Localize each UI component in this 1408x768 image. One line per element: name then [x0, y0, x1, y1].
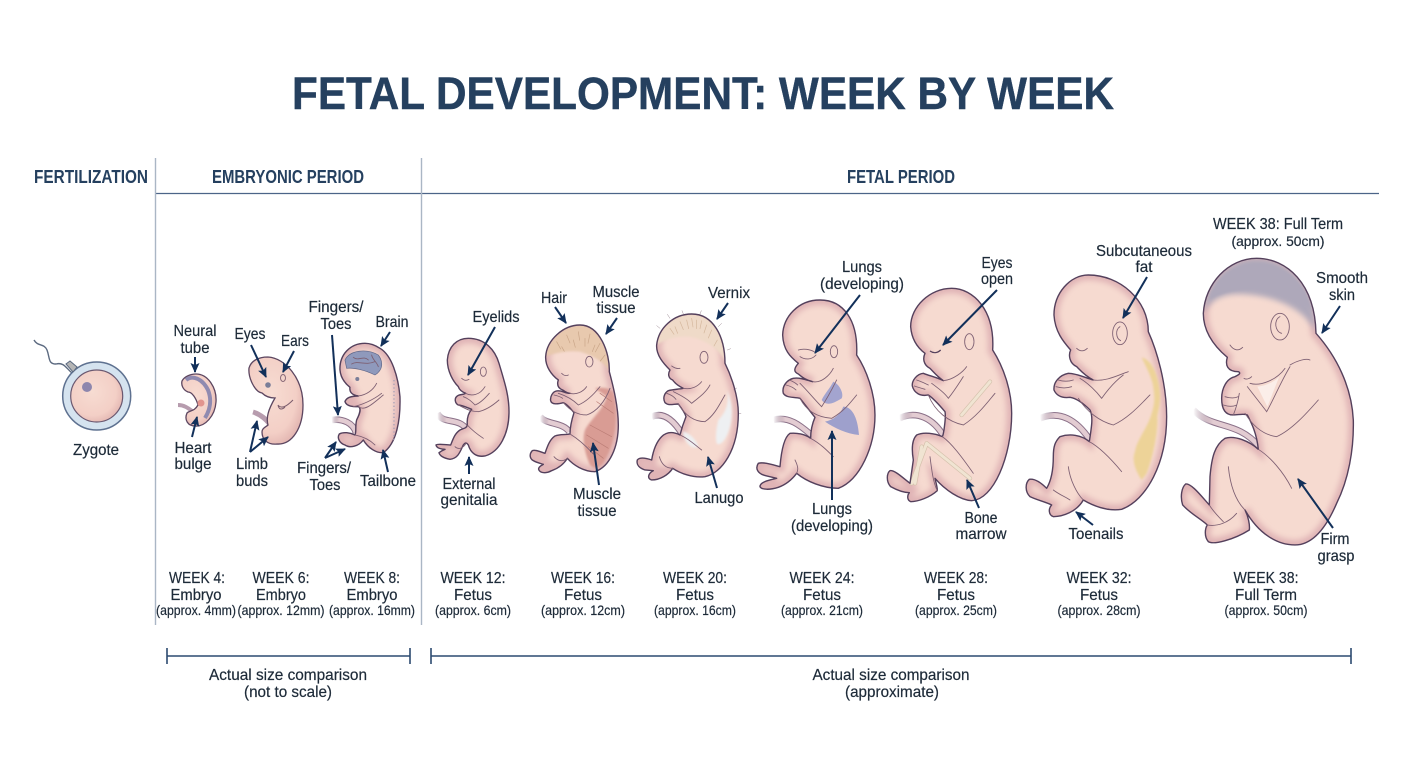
- label: subcutaneous fat: fat: [1136, 259, 1153, 276]
- note: fetal scale: (approximate): [845, 684, 939, 701]
- hair: [546, 326, 608, 368]
- caption: week 32: WEEK 32:: [1066, 570, 1132, 587]
- caption: week 24: WEEK 24:: [790, 570, 854, 587]
- label: fingers/toes upper: [308, 299, 364, 415]
- label: bone marrow: Bone: [964, 510, 998, 527]
- label: eyelids: Eyelids: [472, 309, 520, 326]
- caption: week 4: Embryo: [170, 587, 222, 604]
- label: external genitalia: genitalia: [440, 492, 498, 509]
- caption: week 20: [654, 570, 736, 618]
- caption: week 24: [781, 570, 863, 618]
- heading: week 38 top: [1213, 216, 1343, 249]
- title: FETAL DEVELOPMENT: WEEK BY WEEK: [292, 68, 1114, 119]
- label: eyelids: [468, 309, 520, 375]
- caption: week 24: (approx. 21cm): [781, 602, 863, 618]
- bracket: fetal size comparison: [431, 648, 1351, 664]
- label: tailbone: Tailbone: [360, 473, 416, 490]
- label: firm grasp: grasp: [1318, 548, 1355, 565]
- fetus: week 28: [887, 288, 1012, 502]
- label: bone marrow: marrow: [956, 526, 1007, 543]
- gap between chin and arm: [1257, 377, 1279, 407]
- caption: week 32: Fetus: [1080, 587, 1118, 604]
- fetus: week 6: [249, 357, 303, 444]
- label: lanugo: [694, 457, 744, 507]
- label: bone marrow: [956, 480, 1007, 543]
- lungs: [822, 382, 842, 404]
- caption: week 6: WEEK 6:: [252, 570, 310, 587]
- panel: week 28 fetus: [887, 255, 1013, 618]
- fetus: week 16: [530, 325, 618, 473]
- panel: week 38 full term: [1181, 216, 1368, 618]
- caption: week 12: Fetus: [454, 587, 492, 604]
- note: fetal scale: Actual size comparison: [812, 667, 970, 684]
- fetus: week 24: [757, 300, 875, 489]
- label: eyes: [234, 326, 266, 377]
- note: fetal scale: [812, 667, 970, 701]
- caption: week 8: (approx. 16mm): [329, 602, 415, 618]
- caption: week 28: WEEK 28:: [924, 570, 988, 587]
- label: vernix: Vernix: [708, 285, 750, 302]
- hair: [657, 314, 725, 362]
- label: toenails: [1068, 512, 1124, 543]
- note: embryonic scale: (not to scale): [244, 684, 332, 701]
- caption: week 38: [1224, 570, 1308, 618]
- label: fingers/toes lower: [297, 442, 352, 494]
- note: embryonic scale: [209, 667, 367, 701]
- label: subcutaneous fat: Subcutaneous: [1096, 243, 1192, 260]
- label: toenails: Toenails: [1068, 526, 1124, 543]
- label: brain: [376, 314, 408, 346]
- label: firm grasp: [1298, 479, 1355, 565]
- fetus: week 20: [637, 311, 741, 480]
- fetus: week 38: [1181, 258, 1353, 545]
- muscle tissue: [584, 388, 616, 468]
- caption: week 38: Full Term: [1235, 587, 1297, 604]
- caption: week 8: [329, 570, 415, 618]
- label: fingers/toes upper: Fingers/: [308, 299, 364, 316]
- label: heart bulge: bulge: [174, 456, 212, 473]
- icon: egg cell: [63, 361, 131, 430]
- label: limb buds: [236, 421, 268, 490]
- label: external genitalia: [440, 457, 498, 509]
- panel: week 20 fetus: [637, 285, 750, 618]
- head shading: [1203, 258, 1316, 333]
- caption: week 6: (approx. 12mm): [238, 602, 324, 618]
- label: lungs top: [815, 259, 904, 353]
- label: ears: Ears: [281, 333, 309, 350]
- heading: week 38 top: WEEK 38: Full Term: [1213, 216, 1343, 233]
- panel: week 32 fetus: [1026, 243, 1192, 618]
- label: smooth skin: Smooth: [1316, 270, 1368, 287]
- caption: week 16: [541, 570, 625, 618]
- label: neural tube: tube: [180, 340, 210, 357]
- label: muscle tissue top: [592, 284, 640, 334]
- label: lungs bottom: Lungs: [812, 501, 852, 518]
- caption: week 24: Fetus: [803, 587, 841, 604]
- label: muscle tissue bottom: tissue: [578, 503, 617, 520]
- brain: [345, 351, 382, 375]
- panel: week 8 embryo: [297, 299, 416, 618]
- label: smooth skin: [1316, 270, 1368, 333]
- caption: week 12: WEEK 12:: [440, 570, 506, 587]
- caption: week 20: (approx. 16cm): [654, 602, 736, 618]
- panel: week 16 fetus: [530, 284, 640, 618]
- bones: [912, 382, 990, 483]
- caption: week 32: [1058, 570, 1140, 618]
- label: brain: Brain: [376, 314, 408, 331]
- label: muscle tissue top: tissue: [596, 300, 636, 317]
- caption: week 28: Fetus: [937, 587, 975, 604]
- fetus: week 12: [436, 338, 509, 459]
- subcutaneous fat: [1134, 357, 1160, 480]
- label: smooth skin: skin: [1329, 287, 1355, 304]
- label: neural tube: [174, 323, 216, 372]
- label: lungs bottom: (developing): [791, 518, 873, 535]
- fetus: week 8: [332, 343, 400, 453]
- caption: week 20: Fetus: [676, 587, 714, 604]
- caption: week 28: [915, 570, 997, 618]
- caption: week 6: Embryo: [256, 587, 306, 604]
- label: eyes open: Eyes: [982, 255, 1012, 272]
- label: limb buds: buds: [236, 473, 268, 490]
- label: heart bulge: [174, 417, 212, 473]
- caption: week 38: (approx. 50cm): [1224, 602, 1308, 618]
- label: neural tube: Neural: [174, 323, 216, 340]
- label: subcutaneous fat: [1096, 243, 1192, 318]
- caption: week 6: [238, 570, 324, 618]
- label: fingers/toes lower: Fingers/: [297, 460, 352, 477]
- label: zygote: Zygote: [73, 442, 119, 459]
- caption: week 12: [435, 570, 511, 618]
- label: lungs top: Lungs: [842, 259, 882, 276]
- icon: sperm tail: [34, 340, 72, 373]
- caption: week 32: (approx. 28cm): [1058, 602, 1140, 618]
- label: lungs bottom: [791, 431, 873, 535]
- label: firm grasp: Firm: [1320, 531, 1350, 548]
- label: lanugo: Lanugo: [694, 490, 744, 507]
- header: embryonic period: EMBRYONIC PERIOD: [212, 167, 364, 187]
- label: eyes: Eyes: [234, 326, 266, 343]
- heading: week 38 top: (approx. 50cm): [1232, 233, 1324, 249]
- label: heart bulge: Heart: [174, 440, 212, 457]
- caption: week 16: (approx. 12cm): [541, 602, 625, 618]
- label: eyes open: [943, 255, 1013, 345]
- label: ears: [281, 333, 309, 372]
- fetus: week 32: [1026, 275, 1167, 517]
- label: tailbone: [360, 450, 416, 490]
- bracket: embryonic size comparison: [167, 648, 410, 664]
- label: external genitalia: External: [442, 476, 496, 493]
- caption: week 38: WEEK 38:: [1234, 570, 1298, 587]
- label: lungs top: (developing): [820, 276, 904, 293]
- label: hair: Hair: [541, 290, 568, 307]
- vernix: [716, 390, 732, 444]
- caption: week 20: WEEK 20:: [663, 570, 727, 587]
- panel: week 6 embryo: [234, 326, 324, 618]
- caption: week 4: (approx. 4mm): [156, 602, 236, 618]
- label: muscle tissue bottom: [573, 443, 621, 520]
- caption: week 8: WEEK 8:: [344, 570, 400, 587]
- label: limb buds: Limb: [236, 456, 268, 473]
- label: hair: [541, 290, 568, 323]
- caption: week 16: WEEK 16:: [551, 570, 615, 587]
- panel: zygote: [34, 340, 131, 459]
- label: muscle tissue bottom: Muscle: [573, 486, 621, 503]
- caption: week 4: [156, 570, 236, 618]
- caption: week 16: Fetus: [564, 587, 602, 604]
- label: fingers/toes upper: Toes: [320, 316, 352, 333]
- caption: week 8: Embryo: [346, 587, 398, 604]
- label: fingers/toes lower: Toes: [310, 477, 340, 494]
- label: vernix: [708, 285, 750, 319]
- label: muscle tissue top: Muscle: [592, 284, 640, 301]
- panel: week 24 fetus: [757, 259, 904, 618]
- label: eyes open: open: [981, 271, 1013, 288]
- note: embryonic scale: Actual size comparison: [209, 667, 367, 684]
- header: fetal period: FETAL PERIOD: [847, 167, 955, 187]
- caption: week 28: (approx. 25cm): [915, 602, 997, 618]
- fetus: week 4: [178, 374, 216, 426]
- panel: week 4 embryo: [156, 323, 236, 618]
- caption: week 4: WEEK 4:: [169, 570, 225, 587]
- panel: week 12 fetus: [435, 309, 520, 618]
- caption: week 12: (approx. 6cm): [435, 602, 511, 618]
- header: fertilization: FERTILIZATION: [34, 167, 148, 187]
